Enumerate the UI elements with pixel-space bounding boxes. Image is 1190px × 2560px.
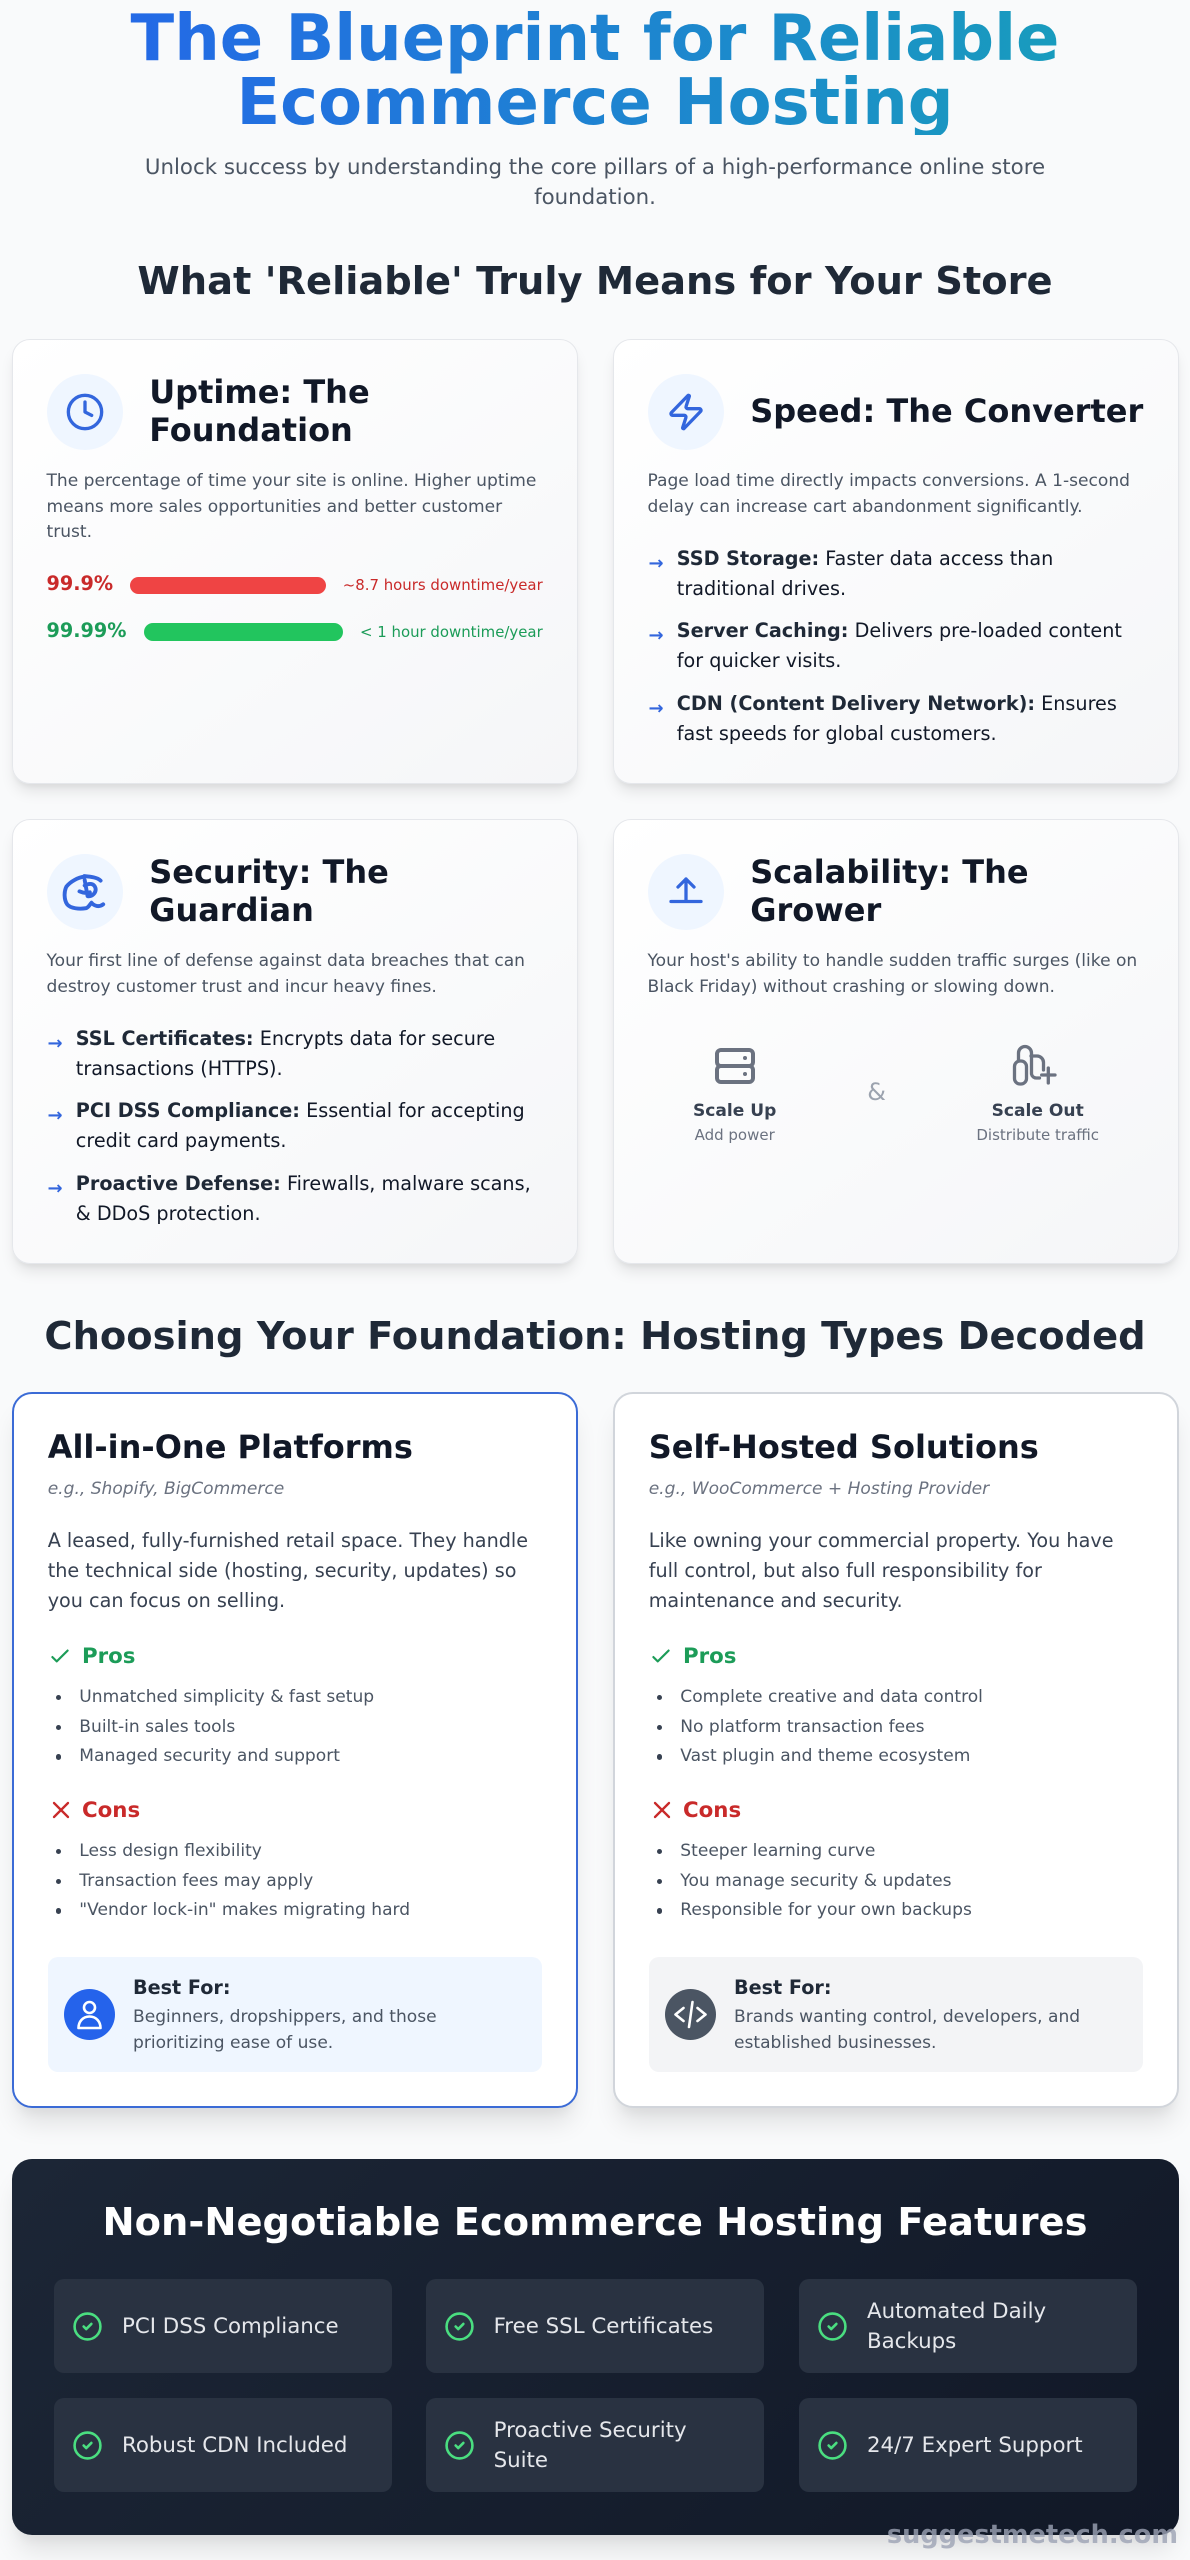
caption: distribute traffic: Distribute traffic	[976, 1126, 1099, 1144]
list: speed factors: fast speeds for global customers.	[677, 722, 997, 745]
heading: features: Non-Negotiable Ecommerce Hosting Features	[103, 2200, 1087, 2245]
icon: clock	[46, 374, 122, 450]
examples: e.g., WooCommerce + Hosting Provider	[649, 1478, 989, 1498]
list: security measures: transactions (HTTPS).	[76, 1057, 283, 1080]
text: scalability description: Your host's ability to handle sudden traffic surges (like on	[648, 951, 1137, 971]
heading: self-hosted: Self-Hosted Solutions	[649, 1428, 1039, 1466]
icon: person	[64, 1989, 115, 2040]
heading: speed: Speed: The Converter	[750, 392, 1143, 430]
panel: all-in-one platforms	[12, 1392, 578, 2108]
label: 99.99% downtime: < 1 hour downtime/year	[360, 623, 543, 641]
list: security measures: →	[48, 1178, 63, 1199]
cons list: You manage security & updates	[680, 1871, 952, 1891]
icon: server	[715, 1048, 755, 1084]
icon: code	[665, 1989, 716, 2040]
text: speed description: Page load time directly impacts conversions. A 1-second	[648, 471, 1130, 491]
best for text: Beginners, dropshippers, and those	[133, 2007, 437, 2027]
pros list	[657, 1687, 983, 1766]
text: uptime description: means more sales opportunities and better customer	[46, 497, 502, 517]
text: security description	[46, 951, 525, 997]
heading: scalability: Grower	[750, 891, 881, 929]
cons heading: Cons	[82, 1798, 140, 1823]
feature: backups	[799, 2279, 1137, 2373]
description: full control, but also full responsibility for	[649, 1559, 1042, 1582]
feature: cdn	[54, 2398, 392, 2492]
cons list: Responsible for your own backups	[680, 1900, 972, 1920]
feature: security suite	[426, 2398, 764, 2492]
text: speed description	[648, 471, 1130, 517]
label: 99.9%: 99.9%	[46, 572, 113, 595]
description: the technical side (hosting, security, updates) so	[48, 1559, 516, 1582]
subtitle	[145, 155, 1045, 210]
description: maintenance and security.	[649, 1589, 903, 1612]
label: scale out: Scale Out	[992, 1101, 1084, 1121]
heading: scalability: Scalability: The	[750, 853, 1029, 891]
cons heading: Cons	[683, 1798, 741, 1823]
list: speed factors: Server Caching: Delivers pre-loaded content	[677, 619, 1122, 642]
list: security measures: →	[48, 1033, 63, 1054]
heading: security: Security: The	[149, 853, 389, 891]
panel: security	[12, 819, 578, 1264]
feature: security suite: Suite	[494, 2448, 548, 2473]
cons list: Steeper learning curve	[680, 1841, 875, 1861]
list: speed factors: SSD Storage: Faster data access than	[677, 547, 1053, 570]
ampersand: &	[867, 1078, 886, 1106]
icon: cross	[52, 1802, 70, 1818]
pros heading: Pros	[82, 1644, 136, 1669]
best for title: Best For:	[133, 1976, 231, 1999]
icon: scale out	[1012, 1044, 1057, 1086]
icon: upload arrow	[648, 854, 724, 930]
watermark: suggestmetech.com	[887, 2520, 1178, 2550]
pros list: Managed security and support	[79, 1746, 340, 1766]
text: scalability description	[648, 951, 1137, 997]
pros heading: Pros	[683, 1644, 736, 1669]
list: security measures: PCI DSS Compliance: Essential for accepting	[76, 1099, 525, 1122]
icon: check	[51, 1649, 69, 1663]
best for text: established businesses.	[734, 2033, 936, 2053]
feature: support: 24/7 Expert Support	[867, 2433, 1083, 2458]
list: speed factors	[648, 547, 1122, 745]
list: speed factors: CDN (Content Delivery Network): Ensures	[677, 692, 1117, 715]
text: security description: destroy customer trust and incur heavy fines.	[46, 977, 437, 997]
description	[48, 1529, 528, 1612]
title	[12, 6, 1178, 134]
icon: cross	[654, 1802, 670, 1818]
title: The Blueprint for Reliable	[131, 2, 1059, 76]
heading: uptime: Uptime: The	[149, 373, 370, 411]
feature: ssl	[426, 2279, 764, 2373]
callout: best for	[648, 1957, 1142, 2072]
subtitle: Unlock success by understanding the core pillars of a high-performance online store	[145, 155, 1045, 180]
list: security measures: & DDoS protection.	[76, 1202, 261, 1225]
list: speed factors: →	[648, 553, 664, 574]
heading: security	[149, 853, 389, 929]
bar: 99.9%	[130, 577, 326, 594]
description: A leased, fully-furnished retail space. They handle	[48, 1529, 528, 1552]
panel: scalability	[613, 819, 1179, 1264]
caption: add power: Add power	[695, 1126, 775, 1144]
panel: uptime	[12, 339, 578, 784]
text: security description: Your first line of defense against data breaches that can	[46, 951, 525, 971]
title: Ecommerce Hosting	[236, 66, 954, 140]
heading: security: Guardian	[149, 891, 314, 929]
best for title: Best For:	[734, 1976, 832, 1999]
list: security measures: credit card payments.	[76, 1129, 286, 1152]
callout: best for	[48, 1957, 542, 2072]
heading: what reliable means: What 'Reliable' Truly Means for Your Store	[137, 259, 1053, 304]
text: uptime description: trust.	[46, 522, 92, 542]
description: you can focus on selling.	[48, 1589, 285, 1612]
feature: ssl: Free SSL Certificates	[494, 2314, 713, 2339]
feature: support	[799, 2398, 1137, 2492]
panel: non-negotiable features	[12, 2159, 1179, 2535]
best for text: prioritizing ease of use.	[133, 2033, 333, 2053]
best for text	[133, 2007, 437, 2053]
list: security measures	[48, 1027, 531, 1225]
description: Like owning your commercial property. You have	[649, 1529, 1114, 1552]
heading: uptime	[149, 373, 370, 449]
heading: all-in-one: All-in-One Platforms	[48, 1428, 413, 1466]
description	[649, 1529, 1114, 1612]
text: uptime description	[46, 471, 536, 542]
list: security measures: Proactive Defense: Firewalls, malware scans,	[76, 1172, 531, 1195]
cons list	[657, 1841, 972, 1920]
heading: scalability	[750, 853, 1029, 929]
pros list: Unmatched simplicity & fast setup	[79, 1687, 374, 1707]
text: uptime description: The percentage of time your site is online. Higher uptime	[46, 471, 536, 491]
cons list: "Vendor lock-in" makes migrating hard	[79, 1900, 410, 1920]
pros list: Built-in sales tools	[79, 1717, 235, 1737]
list: speed factors: →	[648, 698, 664, 719]
examples: e.g., Shopify, BigCommerce	[48, 1478, 284, 1498]
best for text: Brands wanting control, developers, and	[734, 2007, 1080, 2027]
cons list: Less design flexibility	[79, 1841, 262, 1861]
icon: lightning bolt	[648, 374, 724, 450]
feature: pci dss	[54, 2279, 392, 2373]
list: speed factors: traditional drives.	[677, 577, 846, 600]
panel: speed	[613, 339, 1179, 784]
list: speed factors: for quicker visits.	[677, 649, 841, 672]
feature: backups: Automated Daily	[867, 2299, 1046, 2324]
feature: cdn: Robust CDN Included	[122, 2433, 347, 2458]
best for text	[734, 2007, 1080, 2053]
bar: 99.99%	[144, 623, 343, 640]
cons list: Transaction fees may apply	[79, 1871, 313, 1891]
feature: security suite: Proactive Security	[494, 2418, 687, 2443]
list: security measures: →	[48, 1105, 63, 1126]
pros list: Vast plugin and theme ecosystem	[680, 1746, 970, 1766]
icon: shield	[46, 854, 122, 930]
label: scale up: Scale Up	[693, 1101, 776, 1121]
cons list	[56, 1841, 410, 1920]
heading: hosting types: Choosing Your Foundation: Hosting Types Decoded	[44, 1314, 1146, 1358]
text: scalability description: Black Friday) without crashing or slowing down.	[648, 977, 1055, 997]
label: 99.99%: 99.99%	[46, 619, 126, 642]
subtitle: foundation.	[534, 185, 656, 210]
list: speed factors: →	[648, 625, 664, 646]
feature: backups: Backups	[867, 2329, 956, 2354]
pros list: No platform transaction fees	[680, 1717, 925, 1737]
text: speed description: delay can increase cart abandonment significantly.	[648, 497, 1083, 517]
pros list: Complete creative and data control	[680, 1687, 983, 1707]
pros list	[56, 1687, 374, 1766]
list: security measures: SSL Certificates: Encrypts data for secure	[76, 1027, 495, 1050]
feature: pci dss: PCI DSS Compliance	[122, 2314, 339, 2339]
icon: check	[652, 1649, 670, 1663]
panel: self-hosted solutions	[613, 1392, 1179, 2108]
heading: uptime: Foundation	[149, 411, 353, 449]
label: 99.9% downtime: ~8.7 hours downtime/year	[343, 576, 543, 594]
